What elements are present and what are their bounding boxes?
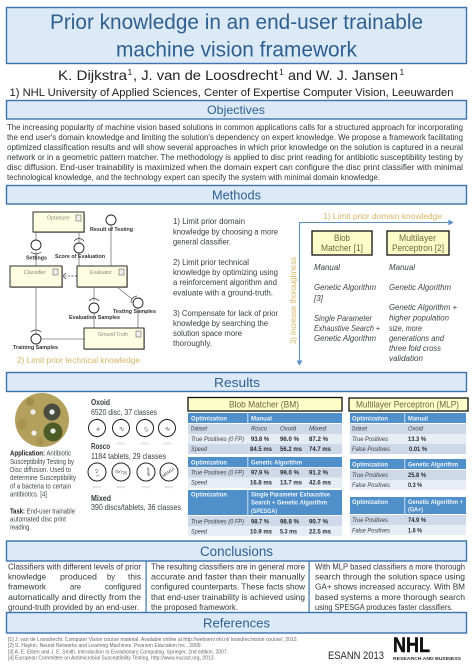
- objectives text: disc diffusion. End-user trainability is maximized when the domain expert can configure the disc print classifier with minimal: [7, 163, 463, 172]
- application description: Application: Antibiotic: [10, 450, 71, 458]
- icons: oxoid disc prints: A2: [164, 425, 172, 432]
- multilayer perceptron methods: [389, 263, 457, 363]
- blob matcher methods: [3]: [313, 294, 324, 303]
- authors: , J. van de Loosdrecht: [133, 67, 278, 83]
- table: blob matcher genetic algorithm: True Positives (0 FP): [191, 470, 244, 476]
- datasets: 1184 tablets, 29 classes: [91, 452, 166, 461]
- multilayer perceptron methods: three fold cross: [389, 344, 441, 353]
- application description: automated disc print: [10, 516, 66, 524]
- conclusion column 1: Classifiers with different levels of prior: [8, 562, 141, 572]
- table: blob matcher manual: Dataset: [191, 426, 208, 432]
- table: blob matcher genetic algorithm: Optimization: [191, 460, 227, 466]
- application description: antibiotics. [4]: [10, 492, 47, 498]
- component diagram: [10, 212, 156, 351]
- table: MLP genetic algorithm: 0.3 %: [408, 482, 422, 489]
- table: blob matcher SPESGA: 90.7 %: [309, 518, 328, 526]
- icons: rosco tablet prints: SXT25: [115, 468, 128, 476]
- heading: methods: Methods: [212, 188, 261, 202]
- conclusion column 1: automatically and directly from the: [8, 592, 141, 602]
- table: MLP manual: 13.3 %: [408, 436, 426, 443]
- table: blob matcher manual: True Positives (0 FP): [191, 436, 244, 443]
- objectives text: The increasing popularity of machine vision based solutions in common applications calls for a structured approach for incorporating: [7, 123, 463, 132]
- table: blob matcher manual: Manual: [251, 416, 272, 422]
- table: blob matcher SPESGA: Search + Genetic Algorithm: [251, 500, 327, 506]
- datasets: 390 discs/tablets, 36 classes: [91, 503, 181, 512]
- table: MLP genetic algorithm: 25.8 %: [408, 472, 426, 479]
- component diagram: Ground Truth: [98, 332, 128, 338]
- multilayer perceptron methods: validation: [389, 354, 424, 363]
- methods list: knowledge by optimizing using: [173, 268, 278, 277]
- affiliation: 1) NHL University of Applied Sciences, Center of Expertise Computer Vision, Leeuwarden: [10, 87, 454, 99]
- heading: conclusions: Conclusions: [200, 544, 273, 559]
- reference list: [2] S. Haykin. Neural Networks and Learning Machines. Pearson Education Inc., 2009.: [8, 643, 202, 649]
- icons: rosco tablet prints: [88, 463, 178, 481]
- methods list: thoroughly.: [173, 339, 212, 348]
- blob matcher methods: Manual: [314, 263, 340, 272]
- blurred captions: [92, 442, 174, 488]
- table: blob matcher SPESGA: 98.7 %: [251, 518, 269, 526]
- conclusion column 3: [315, 562, 465, 612]
- component diagram: Training Samples: [13, 345, 58, 351]
- table: MLP manual: 0.01 %: [409, 446, 427, 453]
- datasets: 6520 disc, 37 classes: [91, 408, 157, 417]
- table: blob matcher genetic algorithm: 16.8 ms: [250, 480, 272, 486]
- objectives text: optimized classification results and will show several approaches in which prior knowledge on the solution is captured in a neural: [7, 143, 463, 152]
- table: MLP genetic algorithm: Genetic Algorithm: [408, 462, 458, 468]
- methods list: [173, 217, 279, 348]
- table: blob matcher manual: 84.5 ms: [250, 446, 272, 453]
- conclusion column 1: framework: [8, 582, 47, 592]
- conclusion column 1: configured: [105, 582, 141, 592]
- conclusion column 2: the proposed framework.: [151, 602, 238, 612]
- table: blob matcher SPESGA: (SPESGA): [251, 508, 277, 515]
- application description: reading.: [10, 524, 31, 532]
- application description: Disc diffusion. Used to: [10, 467, 71, 474]
- datasets: Rosco: [91, 442, 110, 451]
- conclusion column 1: knowledge: [8, 572, 46, 582]
- heading: results: [6, 372, 466, 392]
- table: blob matcher genetic algorithm: 91.2 %: [309, 470, 328, 476]
- table: blob matcher manual: Mixed: [309, 426, 326, 432]
- reference list: [3] A. E. Eiben and J. E. Smith. Introduction to Evolutionary Computing. Springer, 2nd edition, 2007.: [8, 650, 228, 656]
- heading: references: [6, 612, 466, 633]
- datasets: Mixed: [91, 494, 111, 503]
- blob matcher methods: Genetic Algorithm: [314, 334, 376, 343]
- table: blob matcher manual: 87.2 %: [309, 436, 328, 443]
- table: MLP manual: Dataset: [352, 426, 368, 432]
- conclusion column 2: configured counterparts. These facts show: [151, 582, 306, 592]
- methods list: general classifier.: [173, 238, 231, 246]
- box: multilayer perceptron: Multilayer: [399, 233, 436, 243]
- heading: objectives: Objectives: [207, 103, 265, 117]
- heading: methods: [6, 186, 466, 204]
- icon: petri dish: [15, 393, 69, 447]
- icons: oxoid disc prints: A1: [118, 425, 126, 433]
- conclusion column 1: ground-truth provided by an end-user.: [8, 602, 139, 612]
- multilayer perceptron methods: Manual: [389, 263, 415, 272]
- datasets: [91, 398, 181, 512]
- icons: rosco tablet prints: MEM10: [161, 466, 176, 478]
- multilayer perceptron methods: generations and: [389, 334, 445, 343]
- authors: 1: [279, 67, 284, 77]
- table: MLP manual: Optimization: [352, 416, 388, 422]
- table: MLP GA+: 74.9 %: [408, 517, 426, 524]
- arrow: domain knowledge axis: [299, 220, 452, 224]
- blob matcher methods: Genetic Algorithm: [314, 283, 376, 292]
- table: blob matcher manual: 96.0 %: [280, 436, 299, 443]
- table: blob matcher genetic algorithm: 13.7 ms: [280, 480, 302, 486]
- table: MLP manual: Manual: [408, 416, 428, 422]
- heading: conclusions: [6, 541, 466, 561]
- table: blob matcher genetic algorithm: [188, 457, 342, 488]
- component diagram: Score of Evaluation: [55, 254, 105, 260]
- table: blob matcher SPESGA: Speed: [191, 528, 207, 536]
- table: blob matcher manual: Oxoid: [280, 426, 296, 432]
- table: blob matcher SPESGA: 10.9 ms: [250, 528, 272, 536]
- arrow: thoroughness axis: [298, 222, 302, 364]
- table: MLP GA+: (GA+): [408, 506, 423, 514]
- table: blob matcher SPESGA: 22.5 ms: [309, 528, 331, 536]
- authors: 1: [400, 67, 404, 77]
- title: [6, 8, 466, 64]
- table: MLP manual: [350, 413, 466, 454]
- table: blob matcher manual: 93.8 %: [251, 436, 269, 443]
- label: limit prior technical knowledge: 2) Limit prior technical knowledge: [17, 355, 140, 365]
- label: increase thoroughness: 3) Increase thoroughness: [288, 257, 298, 344]
- conclusion column 1: are: [70, 582, 81, 592]
- blob matcher methods: [313, 263, 380, 343]
- icons: rosco tablet prints: AMP: [146, 468, 151, 477]
- heading: objectives: [6, 100, 466, 119]
- application description: Susceptibility Testing by: [10, 459, 74, 466]
- conclusion column 1: this: [128, 572, 141, 582]
- title: machine vision framework: [116, 38, 357, 62]
- table: MLP genetic algorithm: True Positives: [352, 472, 389, 479]
- table: blob matcher manual: Speed: [191, 446, 207, 453]
- table: blob matcher genetic algorithm: 97.9 %: [251, 470, 269, 476]
- table: blob matcher manual: [188, 413, 342, 454]
- objectives text: network or in a geometric pattern matcher. The methodology is applied to disc print reading for antibiotic susceptibility testing by: [7, 153, 463, 162]
- box: multilayer perceptron: Perceptron [2]: [392, 243, 444, 253]
- reference list: [8, 637, 298, 662]
- authors: 1: [128, 67, 132, 77]
- box: multilayer perceptron: [387, 231, 449, 255]
- table: MLP manual: True Positives: [352, 436, 389, 443]
- multilayer perceptron methods: size, more: [389, 324, 422, 333]
- table: MLP GA+: Optimization: [352, 499, 388, 506]
- table: blob matcher genetic algorithm: 42.6 ms: [309, 480, 331, 486]
- multilayer perceptron methods: Genetic Algorithm: [389, 283, 451, 292]
- conclusion column 3: based systems a more thorough search: [315, 592, 465, 602]
- table: MLP genetic algorithm: [350, 459, 466, 490]
- methods list: a reinforcement algorithm and: [173, 278, 277, 287]
- objectives text: the end user's domain knowledge and limiting the solution's dependency on expert knowledge. We propose a framework facilitating: [7, 133, 463, 142]
- table: MLP manual: Oxoid: [408, 426, 423, 432]
- methods list: knowledge by choosing a more: [173, 228, 279, 236]
- table: MLP GA+: Genetic Algorithm +: [408, 499, 463, 506]
- heading: references: References: [203, 616, 270, 630]
- table: MLP genetic algorithm: Optimization: [352, 462, 388, 468]
- table: MLP genetic algorithm: False Positives: [352, 482, 391, 489]
- box: blob matcher: Blob: [334, 233, 350, 243]
- table: blob matcher manual: Rosco: [251, 426, 267, 432]
- logo: NHL: [393, 634, 461, 661]
- conclusion column 2: that end-user trainability is achieved using: [151, 592, 305, 602]
- box: blob matcher heading: [188, 398, 342, 411]
- blob matcher methods: Single Parameter: [314, 314, 372, 323]
- table: MLP GA+: True Positives: [352, 517, 389, 524]
- component diagram: Testing Samples: [113, 309, 156, 315]
- conclusion column 3: search through the solution space using: [315, 572, 465, 582]
- multilayer perceptron methods: Genetic Algorithm +: [389, 303, 457, 312]
- table: MLP manual: False Positives: [352, 446, 391, 453]
- conclusion column 1: by: [107, 572, 116, 582]
- authors: and W. J. Jansen: [288, 67, 398, 83]
- component diagram: Evaluator: [90, 270, 112, 276]
- reference list: [4] European Committee on Antimicrobial Susceptibility Testing, http://www.eucast.org, 2013.: [8, 656, 215, 662]
- conclusion column 2: accurate and faster than their manually: [151, 572, 306, 582]
- component diagram: Classifier: [24, 270, 46, 276]
- box: blob matcher: Matcher [1]: [321, 243, 363, 253]
- table: blob matcher SPESGA: [188, 490, 342, 536]
- table: blob matcher manual: 56.2 ms: [280, 446, 302, 453]
- methods list: 3) Compensate for lack of prior: [173, 309, 278, 318]
- conclusion column 3: GA+ shows increased accuracy. With BM: [315, 582, 465, 592]
- component diagram: Result of Testing: [90, 227, 133, 233]
- blob matcher methods: Exhaustive Search +: [314, 324, 380, 333]
- icons: oxoid disc prints: C3: [143, 426, 150, 433]
- table: blob matcher genetic algorithm: 99.0 %: [280, 470, 299, 476]
- conference label: ESANN 2013: [328, 650, 384, 662]
- methods list: evaluate with a ground-truth.: [173, 288, 273, 298]
- application description: [10, 450, 76, 532]
- application description: determine Susceptibility: [10, 475, 76, 482]
- multilayer perceptron methods: higher population: [389, 314, 450, 322]
- box: multilayer perceptron heading: Multilayer Perceptron (MLP): [356, 400, 459, 410]
- authors: [58, 67, 404, 83]
- icons: oxoid disc prints: [88, 420, 176, 436]
- datasets: Oxoid: [91, 398, 110, 407]
- component diagram: Optimizer: [47, 216, 70, 222]
- table: blob matcher manual: 74.7 ms: [309, 446, 331, 453]
- table: MLP GA+: 1.6 %: [408, 528, 422, 534]
- logo: NHL: RESEARCH AND BUSINESS: [393, 656, 461, 661]
- heading: results: Results: [214, 376, 260, 390]
- icons: oxoid disc prints: S: [95, 426, 101, 432]
- conclusion column 2: The resulting classifiers are in general more: [151, 562, 305, 572]
- box: blob matcher: [312, 231, 372, 255]
- table: blob matcher genetic algorithm: Genetic Algorithm: [251, 460, 302, 466]
- component diagram: Evaluation Samples: [69, 315, 120, 321]
- title: Prior knowledge in an end-user trainable: [50, 11, 423, 34]
- table: MLP GA+: False Positives: [352, 528, 391, 534]
- methods list: 2) Limit prior technical: [173, 258, 249, 267]
- table: blob matcher manual: Optimization: [191, 416, 227, 422]
- objectives text: [7, 123, 463, 182]
- conclusion column 1: [8, 562, 141, 612]
- conclusion column 2: [151, 562, 306, 612]
- table: blob matcher SPESGA: 5.3 ms: [280, 528, 297, 536]
- methods list: knowledge by searching the: [173, 319, 269, 328]
- methods list: 1) Limit prior domain: [173, 217, 245, 226]
- authors: K. Dijkstra: [58, 67, 127, 83]
- box: blob matcher heading: Blob Matcher (BM): [229, 400, 299, 410]
- logo: NHL: NHL: [393, 634, 430, 657]
- table: blob matcher genetic algorithm: Speed: [191, 480, 207, 486]
- application description: of a bacteria to certain: [10, 484, 71, 490]
- reference list: [1] J. van de Loosdrecht. Computer Vision course material. Available online at http://webserv.nhl.nl/ loosdrec/vision course/, 2013.: [8, 637, 298, 643]
- conclusion column 3: using SPESGA produces faster classifiers.: [315, 602, 453, 612]
- table: blob matcher SPESGA: 98.8 %: [280, 518, 299, 526]
- objectives text: technological knowledge, and the technology expert can specify the system with minimal domain knowledge.: [7, 173, 380, 182]
- icons: rosco tablet prints: CL 1: [94, 468, 101, 478]
- application description: Task: End-user trainable: [10, 508, 75, 516]
- conclusion column 1: produced: [60, 572, 97, 582]
- component diagram: Settings: [26, 256, 47, 262]
- methods list: solution space more: [173, 329, 243, 338]
- table: blob matcher SPESGA: Single Parameter Exhaustive: [251, 492, 330, 498]
- label: limit prior domain knowledge: 1) Limit prior domain knowledge: [323, 211, 442, 221]
- table: blob matcher SPESGA: Optimization: [191, 492, 227, 498]
- table: MLP GA+: [350, 497, 466, 535]
- table: blob matcher SPESGA: True Positives (0 FP): [191, 518, 244, 526]
